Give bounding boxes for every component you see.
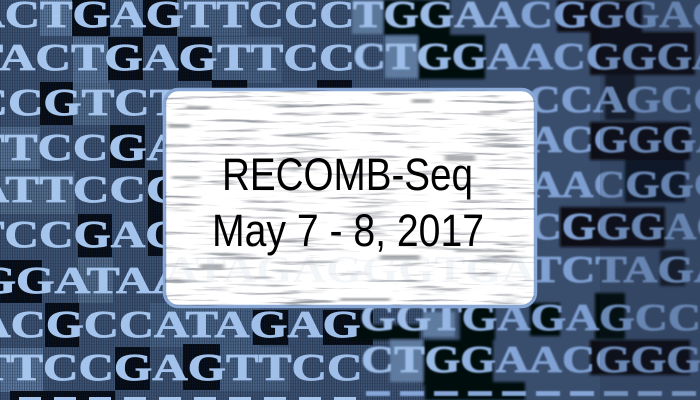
right letters: blurred sequence rows: TCTAGA [530,249,700,291]
title: RECOMB-Seq: RECOMB-Seq [222,149,473,200]
right cells: blurred sequencing tiles [350,0,695,400]
right letters: blurred sequence rows: GGTGAGAGCCC [360,297,700,339]
left letters: sharp sequence rows [0,0,362,389]
right letters: blurred sequence rows: CTGGAACGGGA [353,36,700,78]
panel texture: streaked grey noise: ATAGAGGGTGA [165,249,536,291]
bottom row: tops of cropped letters, right [366,391,696,396]
right edge shading [600,0,700,400]
right letters: blurred sequence rows [353,0,700,381]
bottom row: tops of cropped letters, left [19,397,356,400]
panel: title card [164,90,536,306]
right letters: blurred sequence rows: CTGGAACGGGA [361,339,700,381]
left cells: shaded sequencing tiles [0,0,430,400]
date: May 7 - 8, 2017: May 7 - 8, 2017 [212,205,484,256]
right letters: blurred sequence rows: CCAGCC [528,79,700,121]
panel texture: streaked grey noise [165,90,536,306]
right letters: blurred sequence rows: CGGGAC [530,206,700,248]
right letters: blurred sequence rows: AACGGG [530,164,700,206]
right letters: blurred sequence rows: ACGGGA [530,119,700,161]
